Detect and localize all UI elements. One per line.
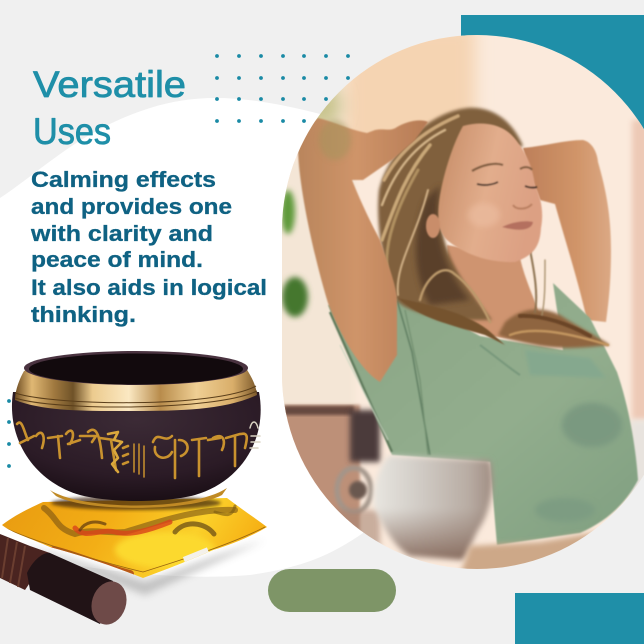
- product: singing bowl set: [0, 351, 270, 629]
- face: [426, 124, 542, 262]
- title: [33, 64, 186, 152]
- hair: [378, 108, 610, 348]
- photo: woman relaxing: [270, 25, 644, 575]
- green pill: [268, 569, 396, 612]
- neck: [446, 244, 538, 340]
- green blur on arm: [319, 120, 351, 160]
- body text: thinking.: [31, 302, 136, 327]
- gold cushion: [0, 495, 270, 580]
- foot ring: [50, 488, 227, 508]
- rim engraved lines: [15, 386, 257, 407]
- bowl body: [12, 392, 261, 501]
- white wave panel: [0, 98, 400, 577]
- body text: Calming effects: [31, 167, 216, 192]
- bottom right teal block: [515, 593, 644, 644]
- body text: and provides one: [31, 194, 232, 219]
- photo background: [270, 25, 644, 575]
- mallet: [0, 534, 132, 629]
- left arm: [298, 118, 428, 382]
- right arm: [523, 140, 611, 322]
- body text: with clarity and: [30, 221, 213, 246]
- table edge: [458, 529, 594, 569]
- title: Versatile: [33, 64, 186, 105]
- bowl shadow on cushion: [51, 496, 221, 510]
- bowl interior: [29, 354, 243, 384]
- bowl rim top edge: [24, 351, 248, 385]
- title: Uses: [33, 111, 111, 152]
- body text: It also aids in logical: [31, 275, 267, 300]
- blurred cup: [374, 456, 493, 560]
- shirt: [328, 283, 638, 545]
- dot grid: [7, 54, 350, 468]
- bowl rim: [15, 355, 257, 411]
- body text: peace of mind.: [31, 247, 203, 272]
- body text: [30, 167, 267, 327]
- inscription band decoration: [17, 422, 260, 478]
- cushion shadow: [20, 540, 265, 595]
- top right teal block: [461, 15, 644, 185]
